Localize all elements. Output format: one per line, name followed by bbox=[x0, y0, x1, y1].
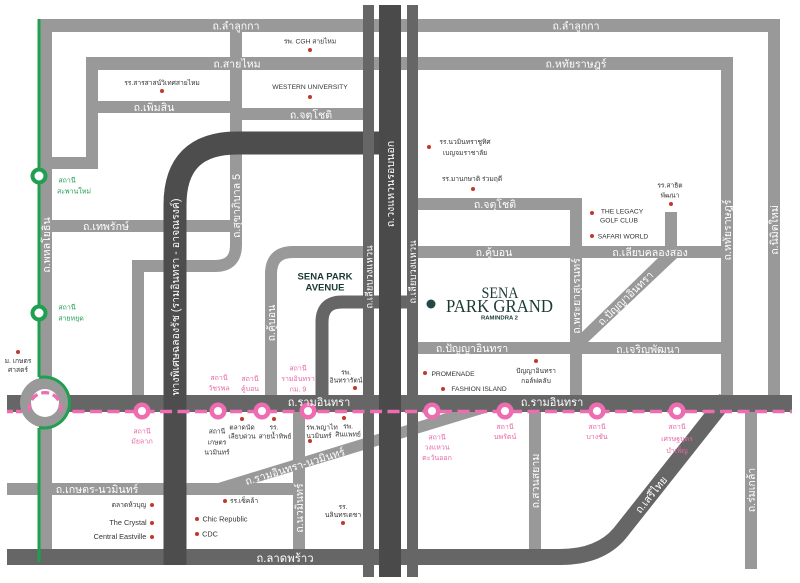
road labels: ถ.ปัญญาอินทรา bbox=[596, 269, 656, 328]
green station labels bbox=[57, 176, 91, 322]
road labels: ถ.เลียบวงแหวน bbox=[364, 245, 376, 309]
pink station labels: สถานี bbox=[241, 375, 259, 383]
point of interest labels: เลียบด่วน bbox=[228, 432, 256, 440]
point of interest labels: รร.สารสาสน์วิเทศสายไหม bbox=[124, 79, 200, 87]
road labels: ถ.ลาดพร้าว bbox=[256, 552, 314, 565]
pink stations bbox=[136, 405, 683, 417]
green station labels: สะพานใหม่ bbox=[57, 186, 91, 196]
point of interest labels: FASHION ISLAND bbox=[451, 386, 507, 393]
road labels: ถ.พระยาสุเรนทร์ bbox=[570, 258, 583, 334]
point of interest labels: ปัญญาอินทรา bbox=[516, 367, 556, 375]
point of interest labels bbox=[5, 38, 683, 541]
pink station labels: สถานี bbox=[496, 423, 514, 431]
point of interest labels: PROMENADE bbox=[431, 371, 475, 378]
point of interest labels: รพ. bbox=[341, 370, 351, 376]
road labels: ถ.เพิ่มสิน bbox=[134, 100, 174, 114]
pink station labels: สถานี bbox=[210, 374, 228, 382]
pink station labels: รามอินทรา bbox=[281, 375, 315, 383]
point of interest labels: กอล์ฟคลับ bbox=[521, 377, 551, 385]
point of interest labels: นวมินทร์ bbox=[204, 448, 230, 456]
pink station labels: สถานี bbox=[588, 423, 606, 431]
green station labels: สถานี bbox=[58, 304, 76, 312]
road labels: ถ.สุขาภิบาล 5 bbox=[231, 174, 243, 238]
point of interest labels: รร.สาธิต bbox=[657, 182, 683, 190]
outer ring parallel roads bbox=[363, 5, 418, 577]
sena park avenue connector road bbox=[322, 302, 418, 397]
pink station labels: สถานี bbox=[289, 364, 307, 372]
point of interest labels: The Crystal bbox=[109, 518, 147, 527]
pink line bbox=[7, 410, 792, 413]
road labels: ถ.เสรีไทย bbox=[632, 474, 670, 516]
roundabout bbox=[20, 377, 70, 428]
road labels: ถ.หทัยราษฎร์ bbox=[721, 199, 734, 260]
expressway bbox=[175, 143, 385, 565]
green station labels: สายหยุด bbox=[58, 316, 84, 322]
project marker dot bbox=[426, 300, 436, 308]
pink station labels: วัชรพล bbox=[208, 384, 230, 392]
point of interest labels: เบญจมราชาลัย bbox=[443, 149, 487, 157]
point of interest labels: GOLF CLUB bbox=[600, 218, 638, 224]
road labels: ถ.รามอินทรา bbox=[288, 397, 350, 409]
point of interest labels: รพ. bbox=[343, 424, 353, 430]
sena park avenue label: AVENUE bbox=[306, 282, 344, 294]
point of interest dots bbox=[16, 48, 673, 539]
road labels: ถ.ลำลูกกา bbox=[212, 20, 260, 32]
road labels: ถ.คู้บอน bbox=[266, 305, 278, 341]
point of interest labels: พัฒนา bbox=[661, 192, 680, 200]
road labels: ถ.หทัยราษฎร์ bbox=[546, 58, 607, 70]
point of interest labels: THE LEGACY bbox=[601, 208, 644, 216]
road labels: ถ.รามอินทรา bbox=[521, 397, 583, 409]
point of interest labels: เกษตร bbox=[208, 440, 227, 446]
sena park grand logo: RAMINDRA 2 bbox=[481, 316, 518, 322]
pink station labels: เศรษฐบุตร bbox=[661, 436, 693, 443]
road labels: ทางพิเศษฉลองรัช (รามอินทรา - อาจณรงค์) bbox=[169, 198, 182, 396]
road labels: ถ.รามอินทรา-นวมินทร์ bbox=[243, 445, 347, 488]
point of interest labels: อินทรารัตน์ bbox=[330, 376, 363, 384]
road labels: ถ.ร่มเกล้า bbox=[746, 468, 758, 512]
point of interest labels: รร.นวมินทราชูทิศ bbox=[439, 138, 491, 146]
pink station labels: บำเพ็ญ bbox=[666, 446, 688, 455]
pink station labels: กม. 9 bbox=[290, 386, 306, 394]
point of interest labels: สินแพทย์ bbox=[335, 430, 361, 438]
point of interest labels: รพ.พญาไท bbox=[306, 424, 338, 432]
road labels: ถ.ลำลูกกา bbox=[552, 20, 600, 32]
road labels: ถ.คู้บอน bbox=[476, 247, 512, 259]
sena park grand logo: PARK GRAND bbox=[446, 296, 553, 316]
point of interest labels: Chic Republic bbox=[202, 514, 248, 524]
point of interest labels: นวมินทร์ bbox=[306, 432, 332, 440]
point of interest labels: รร. bbox=[269, 424, 279, 432]
pink station labels: ตะวันออก bbox=[422, 454, 452, 462]
point of interest labels: นลินทรเดชา bbox=[325, 511, 361, 519]
point of interest labels: รร.เซ็คล้า bbox=[230, 496, 258, 505]
green line bbox=[38, 19, 40, 562]
point of interest labels: รร.มานกษาติ ร่วมฤดี bbox=[442, 175, 502, 183]
road labels: ถ.เลียบคลองสอง bbox=[612, 246, 688, 259]
point of interest labels: SAFARI WORLD bbox=[598, 234, 648, 240]
road labels: ถ.ปัญญาอินทรา bbox=[436, 343, 508, 355]
pink station labels: คู้บอน bbox=[241, 385, 259, 393]
sena park grand logo bbox=[446, 285, 553, 322]
lat phrao and seri thai road bbox=[7, 399, 726, 557]
green stations bbox=[32, 170, 46, 320]
road labels: ถ.วงแหวนรอบนอก bbox=[385, 141, 397, 227]
point of interest labels: WESTERN UNIVERSITY bbox=[272, 84, 348, 91]
road labels: ถ.สวนสยาม bbox=[530, 454, 542, 508]
point of interest labels: ศาสตร์ bbox=[8, 366, 28, 374]
road labels: ถ.เกษตร-นวมินทร์ bbox=[56, 483, 139, 496]
road labels: ถ.จตุโชติ bbox=[474, 198, 516, 211]
road labels: ถ.เทพรักษ์ bbox=[83, 220, 129, 233]
sena park avenue label: SENA PARK bbox=[298, 272, 353, 282]
road labels: ถ.สายไหม bbox=[213, 58, 261, 70]
point of interest labels: รร. bbox=[338, 504, 348, 511]
ramindra road bbox=[7, 395, 792, 412]
road labels: ถ.จตุโชติ bbox=[290, 108, 332, 122]
point of interest labels: ตลาดห้วบุญ bbox=[112, 501, 147, 509]
road labels: ถ.นิมิตใหม่ bbox=[768, 205, 781, 255]
point of interest labels: ตลาดนัด bbox=[229, 424, 255, 432]
point of interest labels: ม. เกษตร bbox=[5, 358, 32, 365]
point of interest labels: สายน้ำทิพย์ bbox=[259, 432, 291, 440]
pink station labels: วงแหวน bbox=[424, 444, 450, 452]
sena park avenue label bbox=[298, 272, 353, 294]
pink station labels: สถานี bbox=[668, 423, 686, 431]
road labels: ถ.พหลโยธิน bbox=[40, 217, 53, 273]
road labels: ถ.เจริญพัฒนา bbox=[616, 344, 680, 356]
pink station labels: สถานี bbox=[133, 428, 151, 436]
outer ring main road bbox=[379, 5, 401, 577]
road labels: ถ.เลียบวงแหวน bbox=[407, 240, 419, 304]
pink station labels: มัยลาภ bbox=[131, 438, 153, 446]
point of interest labels: Central Eastville bbox=[94, 532, 146, 541]
pink station labels: บางชัน bbox=[586, 433, 608, 441]
point of interest labels: สถานี bbox=[209, 428, 226, 436]
pink station labels bbox=[131, 364, 693, 462]
road labels: ถ.นวมินทร์ bbox=[293, 483, 306, 533]
point of interest labels: CDC bbox=[202, 530, 218, 538]
sena park grand logo: SENA bbox=[482, 285, 519, 302]
green station labels: สถานี bbox=[58, 176, 76, 184]
pink station labels: นพรัตน์ bbox=[494, 433, 516, 441]
point of interest labels: รพ. CGH สายไหม bbox=[284, 38, 336, 46]
pink station labels: สถานี bbox=[428, 434, 446, 442]
